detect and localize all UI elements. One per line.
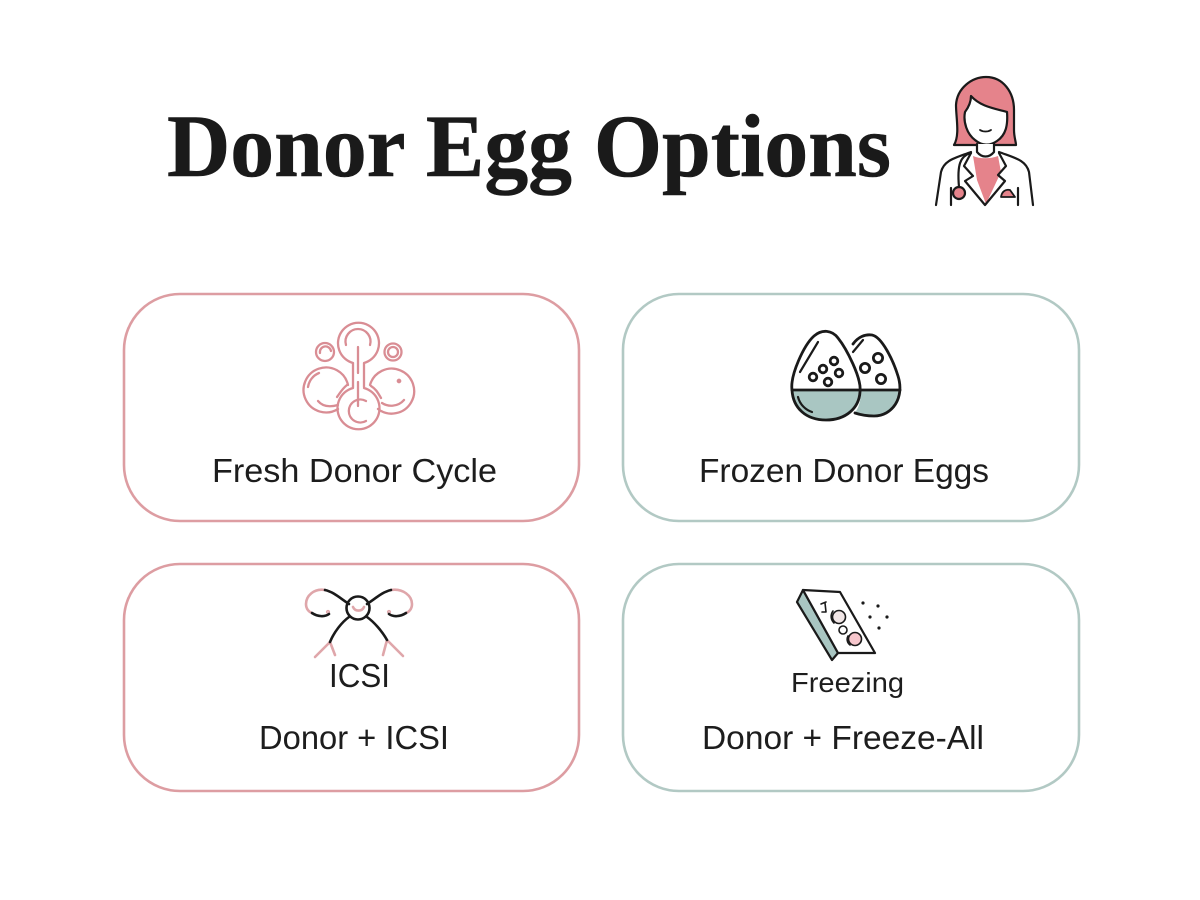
panel: fresh donor cycle: [124, 294, 579, 521]
icon: doctor: [936, 77, 1033, 205]
icon: follicles: [304, 323, 414, 429]
label: frozen donor eggs: Frozen Donor Eggs: [699, 452, 989, 489]
panel: donor + ICSI: [124, 564, 579, 791]
icon: ICSI bow: [306, 590, 412, 657]
icon: freezing tray: [797, 590, 889, 660]
label: freezing icon caption: Freezing: [791, 667, 904, 698]
label: ICSI icon caption: ICSI: [329, 657, 390, 694]
panel: frozen donor eggs: [623, 294, 1079, 521]
icon: frozen eggs: [792, 331, 901, 420]
label: donor + freeze-all: Donor + Freeze-All: [702, 719, 984, 756]
title: Donor Egg Options: [167, 98, 891, 196]
label: donor + ICSI: Donor + ICSI: [259, 719, 449, 756]
label: fresh donor cycle: Fresh Donor Cycle: [212, 452, 497, 489]
panel: donor + freeze-all: [623, 564, 1079, 791]
